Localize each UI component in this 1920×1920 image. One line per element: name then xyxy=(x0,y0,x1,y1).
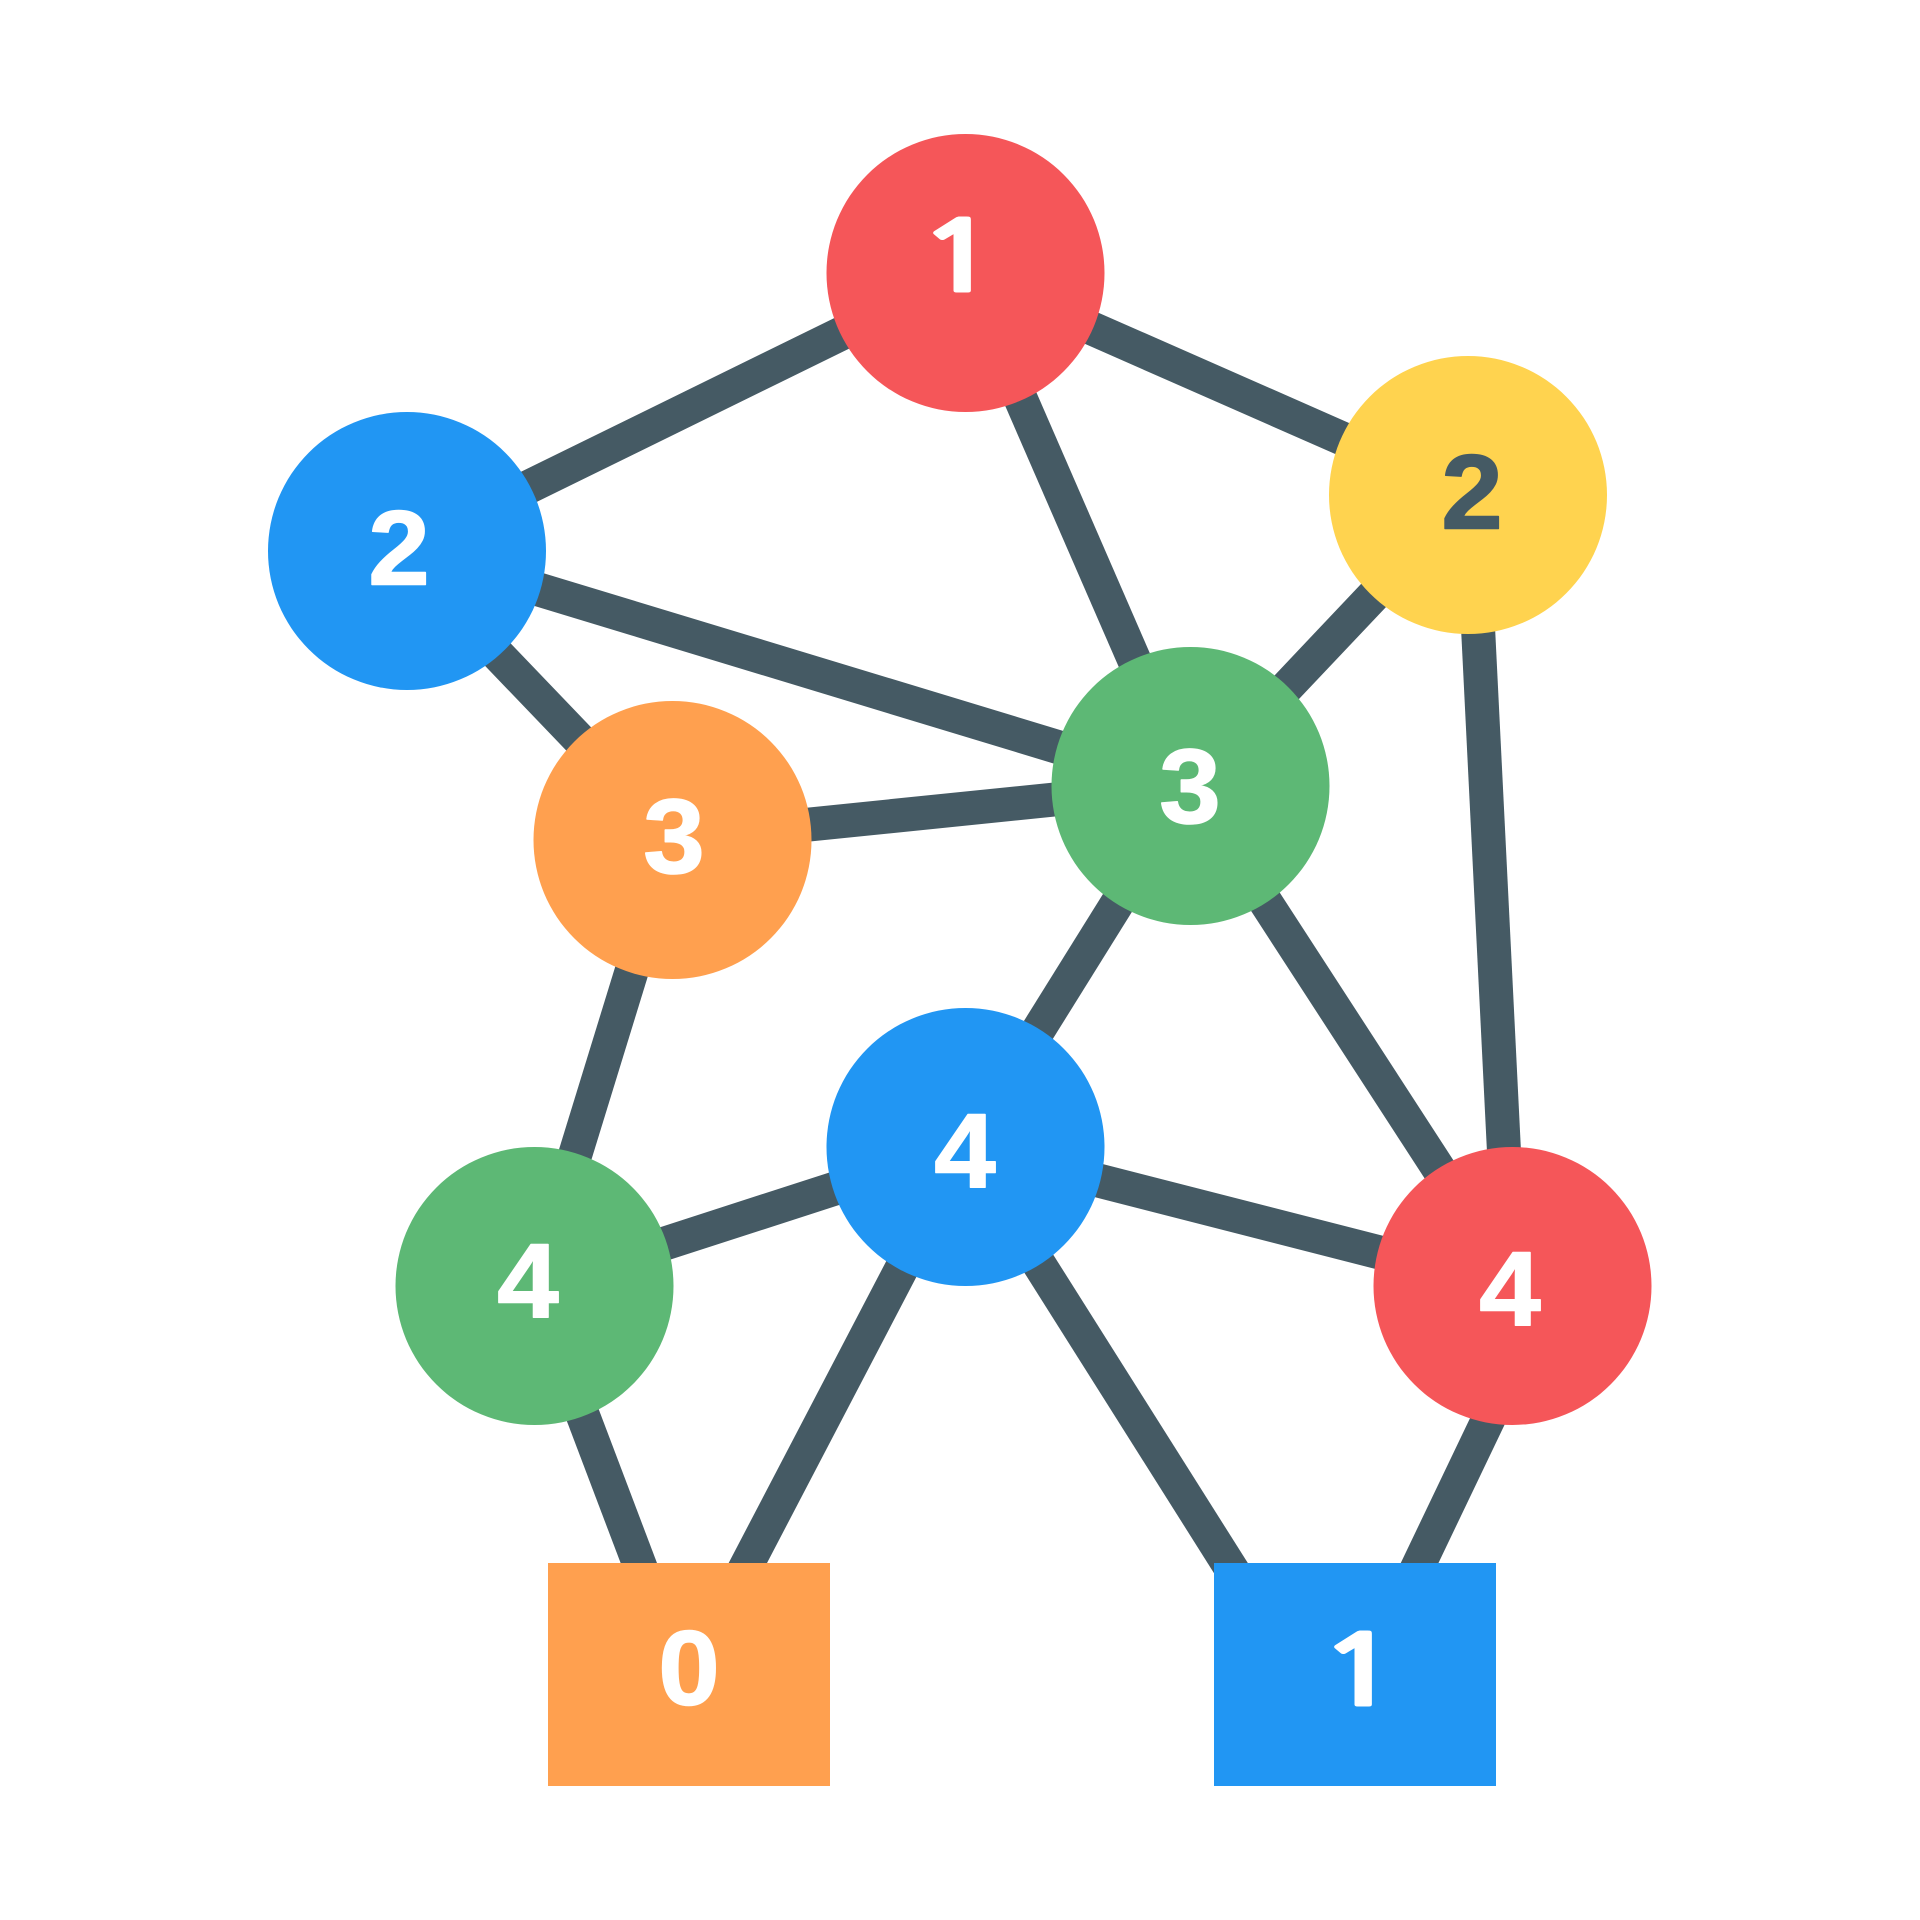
edge: top red to center green xyxy=(1009,372,1146,687)
node: right red 4 xyxy=(1374,1147,1652,1425)
node: top red 1 xyxy=(826,134,1104,412)
node: center blue 4: 4 xyxy=(934,1092,996,1210)
edge: left blue to orange xyxy=(480,636,596,757)
edge: right red to blue square xyxy=(1411,1397,1499,1581)
edge: center green to center blue xyxy=(1024,878,1133,1053)
node: blue square 1 xyxy=(1214,1563,1496,1786)
node: orange square 0: 0 xyxy=(658,1610,720,1728)
edge: yellow to center green xyxy=(1269,577,1391,706)
node: orange square 0 xyxy=(548,1563,830,1786)
node: left blue 2 xyxy=(268,412,546,690)
edge: orange to lower green xyxy=(568,944,640,1178)
edge: lower green to orange square xyxy=(574,1392,646,1582)
edge: lower green to center blue xyxy=(648,1183,852,1249)
node: orange 3 xyxy=(534,701,812,979)
edge: center blue to blue square xyxy=(1015,1226,1246,1592)
node: lower green 4: 4 xyxy=(497,1222,559,1340)
node: blue square 1: 1 xyxy=(1317,1624,1403,1721)
node: left blue 2: 2 xyxy=(368,490,430,608)
edge: center blue to orange square xyxy=(740,1239,917,1578)
node: orange 3: 3 xyxy=(643,778,705,896)
edge: left blue to center green xyxy=(514,582,1084,755)
node: yellow 2: 2 xyxy=(1441,434,1503,552)
node: right red 4: 4 xyxy=(1479,1230,1541,1348)
node: yellow 2 xyxy=(1329,356,1607,634)
edge: top red to yellow xyxy=(1066,317,1366,449)
edge: top red to left blue xyxy=(500,318,873,501)
node: lower green 4 xyxy=(396,1147,674,1425)
edge: orange to center green xyxy=(785,797,1079,827)
edge: center blue to right red xyxy=(1073,1174,1405,1259)
node: center green 3: 3 xyxy=(1159,728,1221,846)
node: center blue 4 xyxy=(826,1008,1104,1286)
edge: center green to right red xyxy=(1250,878,1455,1194)
network connectors xyxy=(480,317,1505,1592)
edge: yellow to right red xyxy=(1477,607,1505,1172)
node: top red 1: 1 xyxy=(916,210,1002,307)
node: center green 3 xyxy=(1052,647,1330,925)
